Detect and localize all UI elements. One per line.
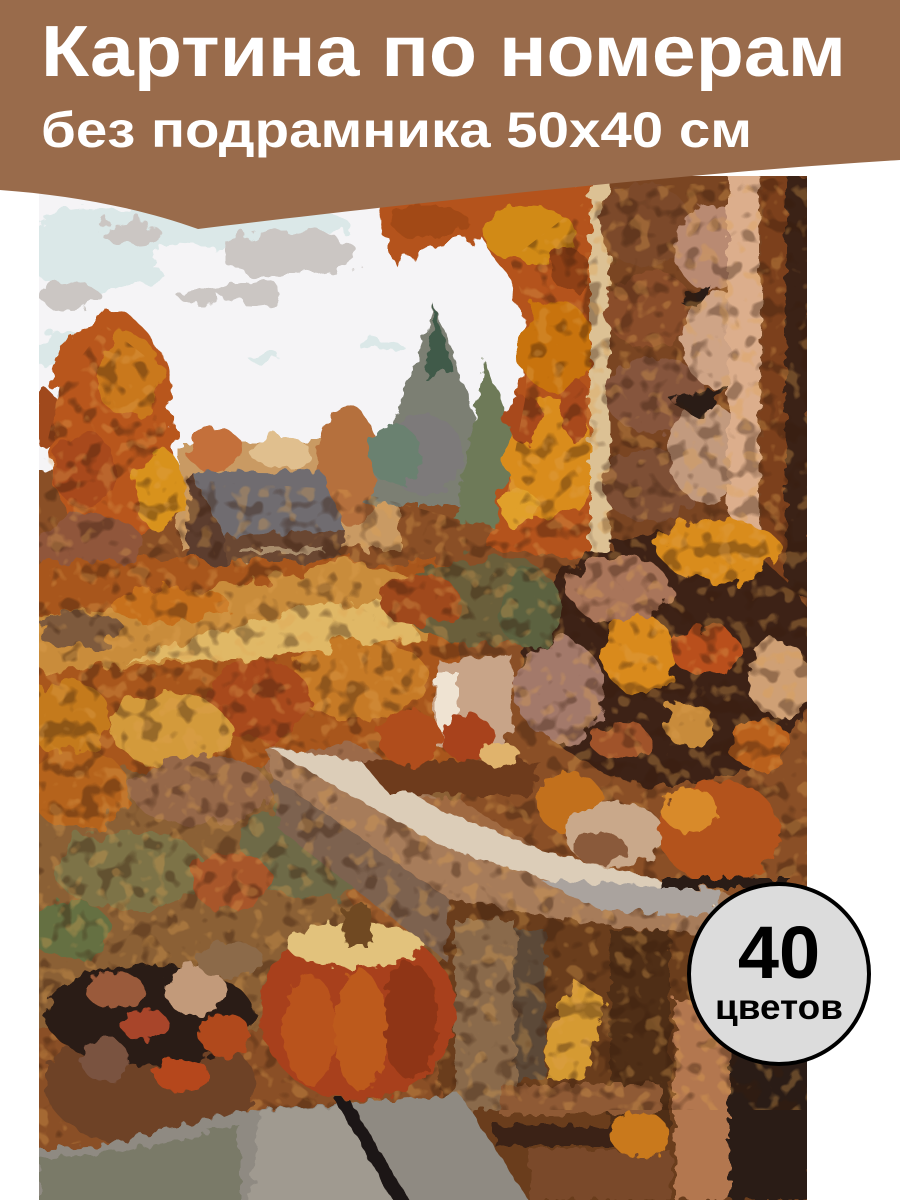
sky with clouds [39, 186, 576, 472]
large pumpkin [260, 905, 456, 1100]
badge: 40 colours [689, 884, 869, 1064]
subtitle: без подрамника 50х40 см [41, 102, 752, 158]
banner: top brown band with pointed bottom edge [0, 0, 900, 229]
pumpkins on ledge [536, 773, 790, 888]
painting: autumn porch scene [20, 170, 820, 1200]
meadow and path [20, 560, 460, 780]
distant cabin [184, 468, 348, 568]
badge: 40 colours: 40 [738, 911, 820, 994]
vase and fruit bowl [360, 655, 540, 795]
flowers in the corner [380, 518, 820, 785]
pine trees [365, 305, 530, 530]
right autumn tree [378, 176, 610, 560]
lower-left foliage [20, 744, 460, 1030]
wooden floor planks [30, 1095, 535, 1200]
ledge highlight [270, 748, 720, 915]
post and lower wall [440, 900, 820, 1200]
title: Картина по номерам [41, 12, 846, 92]
log wall [590, 170, 820, 596]
paint-by-number mottling [39, 176, 807, 1200]
left autumn tree [34, 312, 184, 582]
badge: 40 colours: цветов [715, 988, 843, 1027]
distant treeline [180, 407, 400, 550]
porch ledge [268, 745, 740, 960]
basket of vegetables [45, 942, 264, 1147]
